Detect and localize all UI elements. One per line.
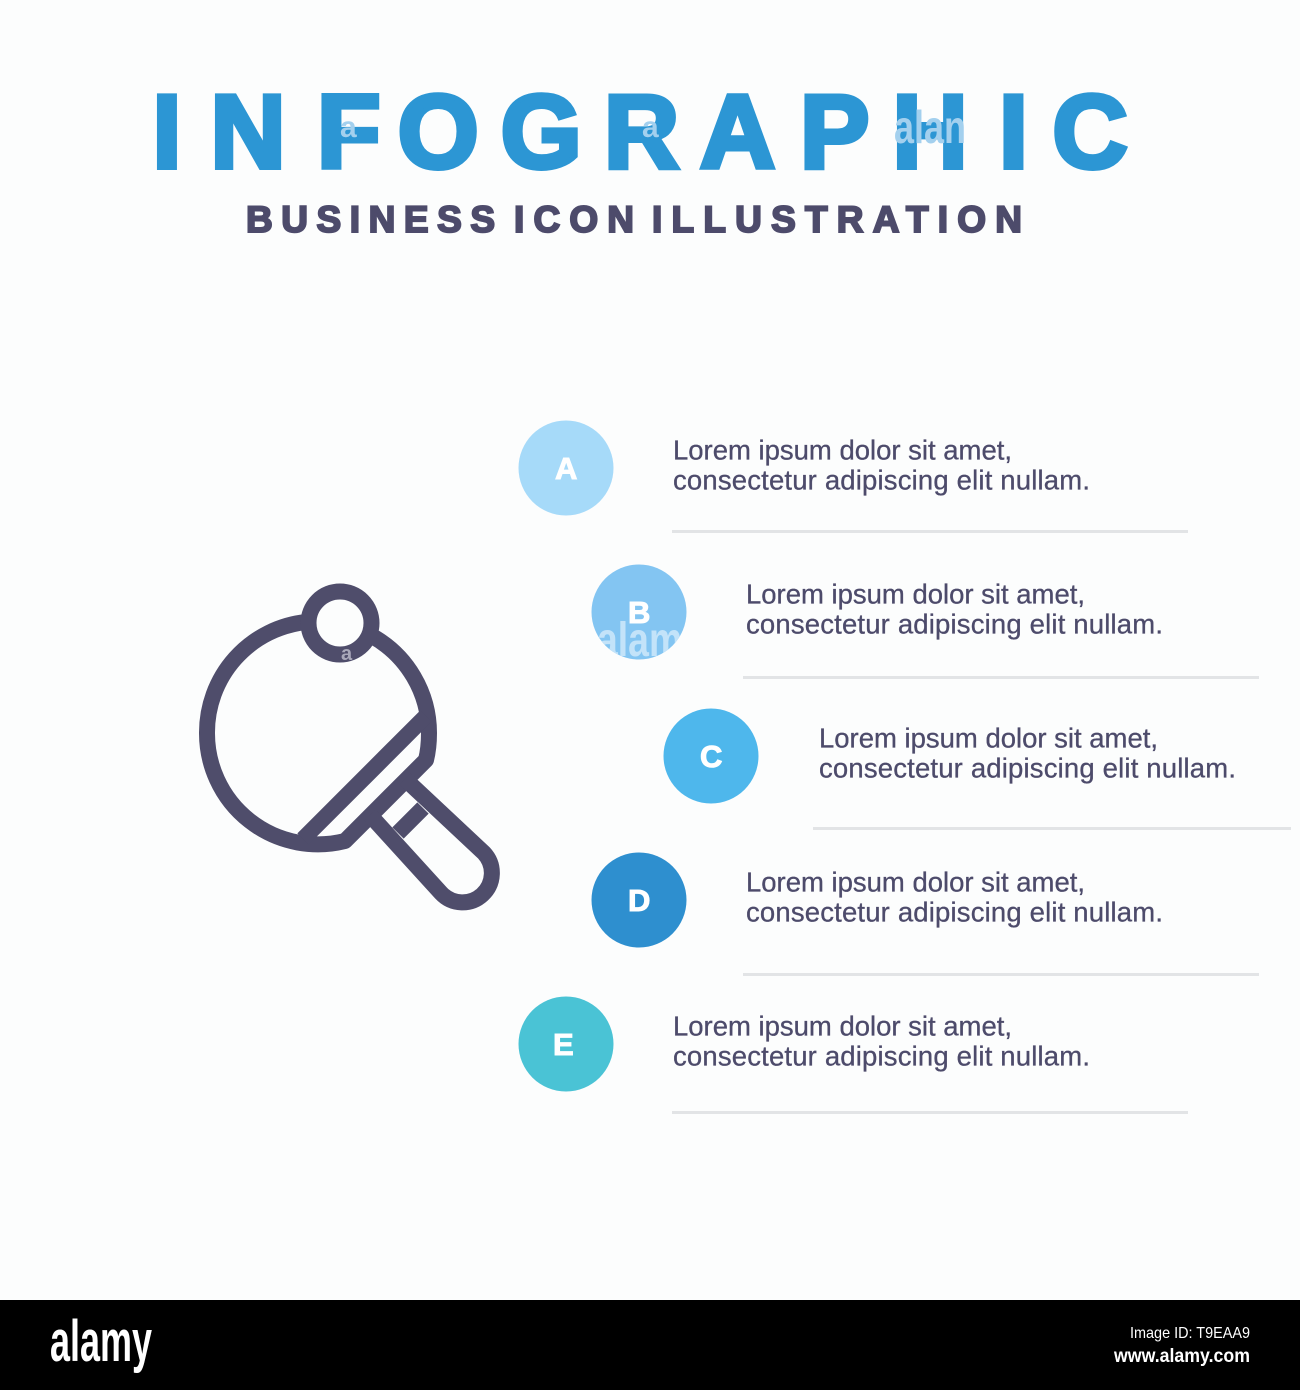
title watermark fragments: a [340, 111, 357, 144]
text E: consectetur adipiscing elit nullam. [673, 1040, 1090, 1072]
step A [518, 420, 1188, 533]
badge A [518, 420, 614, 516]
text A: Lorem ipsum dolor sit amet, [673, 434, 1012, 466]
text B: consectetur adipiscing elit nullam. [746, 608, 1163, 640]
badge C [664, 708, 758, 804]
text D: consectetur adipiscing elit nullam. [746, 896, 1163, 928]
step B [592, 564, 1259, 679]
step E [518, 996, 1188, 1114]
badge C: C [700, 739, 722, 774]
image id: Image ID: T9EAA9 [1130, 1325, 1250, 1342]
text C: Lorem ipsum dolor sit amet, [819, 722, 1158, 754]
subtitle [246, 199, 1022, 240]
badge D [592, 852, 686, 948]
title watermark fragments: alan [894, 101, 966, 153]
title watermark fragments [340, 101, 966, 153]
footer bar [0, 1300, 1300, 1390]
text B: Lorem ipsum dolor sit amet, [746, 578, 1085, 610]
website: www.alamy.com [1113, 1346, 1250, 1367]
subtitle: ICON [514, 199, 634, 240]
badge B [592, 564, 686, 660]
text C: consectetur adipiscing elit nullam. [819, 752, 1236, 784]
badge D: D [628, 883, 650, 918]
subtitle: ILLUSTRATION [652, 199, 1022, 240]
step C [664, 708, 1291, 830]
title: INFOGRAPHIC [152, 74, 1128, 190]
footer logo: alamy [50, 1309, 152, 1374]
title watermark fragments: a [642, 111, 659, 144]
badge A: A [555, 451, 577, 486]
badge B: B [628, 595, 650, 630]
step D [592, 852, 1259, 976]
badge E: E [553, 1027, 574, 1062]
badge B: alamy [597, 614, 703, 667]
subtitle: BUSINESS [246, 199, 495, 240]
text A: consectetur adipiscing elit nullam. [673, 464, 1090, 496]
text E: Lorem ipsum dolor sit amet, [673, 1010, 1012, 1042]
badge E [518, 996, 614, 1092]
text D: Lorem ipsum dolor sit amet, [746, 866, 1085, 898]
icon: table tennis paddle and ball: a [341, 643, 353, 665]
icon: table tennis paddle and ball [207, 592, 492, 902]
